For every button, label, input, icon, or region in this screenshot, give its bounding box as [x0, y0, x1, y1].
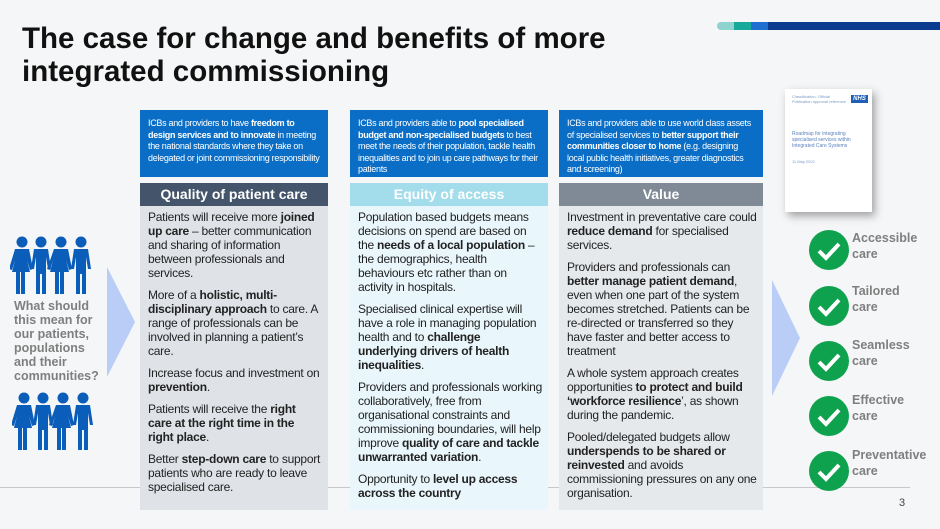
- title: The case for change and benefits of more: [22, 22, 606, 55]
- top colour bar: [717, 22, 940, 30]
- panel: equity: [350, 110, 548, 510]
- body: value: Pooled/delegated budgets allow underspends to be shared or reinvested and avoids commissioning pressures on any one organisation.: [567, 430, 757, 500]
- heading: equity: Equity of access: [394, 186, 504, 202]
- body: equity: Opportunity to level up access across the country: [358, 472, 517, 500]
- check: seamless: care: [852, 354, 878, 368]
- icon: people bottom: [12, 392, 93, 450]
- document thumbnail: Roadmap for integrating: [792, 131, 846, 137]
- check: preventative: Preventative: [852, 448, 926, 462]
- body: quality: [140, 206, 328, 510]
- check: effective: Effective: [852, 393, 904, 407]
- text: question: What should: [14, 299, 89, 313]
- text: question: our patients,: [14, 327, 89, 341]
- blue box 3: ICBs and providers able to use world class assets of specialised services to better support their communities closer to home (e.g. designing local public health initiatives, greater diagnostics and screening): [567, 118, 751, 174]
- body: equity: Providers and professionals working collaboratively, free from organisational constraints and commissioning boundaries, will help improve quality of care and tackle unwarranted variation.: [358, 380, 542, 464]
- text: question: communities?: [14, 369, 99, 383]
- check: tailored: Tailored: [852, 284, 900, 298]
- document thumbnail: [785, 89, 872, 212]
- body: value: Investment in preventative care could reduce demand for specialised services.: [567, 210, 757, 252]
- body: equity: [350, 206, 548, 510]
- text: question: populations: [14, 341, 85, 355]
- check: preventative: [809, 448, 926, 491]
- arrow: right: [772, 280, 800, 396]
- check: tailored: [809, 284, 900, 326]
- body: quality: Better step-down care to support patients who are ready to leave specialised care.: [148, 452, 320, 494]
- body: quality: Patients will receive the right care at the right time in the right place.: [148, 402, 296, 444]
- check: seamless: Seamless: [852, 338, 910, 352]
- divider: [0, 487, 910, 488]
- arrow: left: [107, 267, 135, 377]
- check: seamless: [809, 338, 910, 381]
- heading: value: [559, 183, 763, 206]
- icon: people top: [10, 236, 91, 294]
- outcomes list: [809, 230, 926, 491]
- panel: value: [559, 110, 763, 510]
- document thumbnail: 11 May 2022: [792, 159, 815, 164]
- body: quality: Increase focus and investment on prevention.: [148, 366, 319, 394]
- check: preventative: care: [852, 464, 878, 478]
- body: quality: More of a holistic, multi-disciplinary approach to care. A range of professionals can be involved in planning a patient’s care.: [148, 288, 317, 358]
- check: accessible: Accessible: [852, 231, 917, 245]
- NHS logo: [851, 95, 868, 103]
- NHS logo: NHS: [853, 96, 866, 102]
- document thumbnail: Publication approval reference: [792, 99, 846, 104]
- heading: quality: [140, 183, 328, 206]
- title: [22, 22, 606, 88]
- document thumbnail: Classification: Official: [792, 94, 830, 99]
- title: integrated commissioning: [22, 55, 389, 88]
- body: value: [559, 206, 763, 510]
- blue box 1: ICBs and providers to have freedom to design services and to innovate in meeting the national standards where they take on delegated or joint commissioning responsibility: [148, 118, 320, 162]
- check: tailored: care: [852, 300, 878, 314]
- text: question: [14, 299, 99, 383]
- text: question: and their: [14, 355, 67, 369]
- heading: value: Value: [643, 186, 679, 202]
- body: equity: Population based budgets means decisions on spend are based on the needs of a local population – the demographics, health behaviours etc rather than on activity in hospitals.: [358, 210, 534, 294]
- check: accessible: [809, 230, 917, 270]
- blue box 2: ICBs and providers able to pool specialised budget and non-specialised budgets to best meet the needs of their population, tackle health inequalities and to join up care pathways for their patients: [358, 118, 538, 174]
- body: value: A whole system approach creates opportunities to protect and build ‘workforce resilience’, as shown during the pandemic.: [567, 366, 743, 422]
- body: equity: Specialised clinical expertise will have a role in managing population health and to challenge underlying drivers of health inequalities.: [358, 302, 536, 372]
- check: effective: care: [852, 409, 878, 423]
- heading: quality: Quality of patient care: [160, 186, 308, 202]
- check: effective: [809, 393, 904, 436]
- document thumbnail: Integrated Care Systems: [792, 143, 847, 149]
- panel: quality: [140, 110, 328, 510]
- body: quality: Patients will receive more joined up care – better communication and sharing of information between professionals and services.: [148, 210, 314, 280]
- blue box 1: [140, 110, 328, 177]
- heading: equity: [350, 183, 548, 206]
- body: value: Providers and professionals can better manage patient demand, even when one part of the system becomes stretched. Patients can be re-directed or transferred so they have faster and better access to treatment: [567, 260, 749, 358]
- text: question: this mean for: [14, 313, 92, 327]
- page number: 3: [899, 497, 905, 509]
- check: accessible: care: [852, 247, 878, 261]
- document thumbnail: specialised services within: [792, 137, 851, 143]
